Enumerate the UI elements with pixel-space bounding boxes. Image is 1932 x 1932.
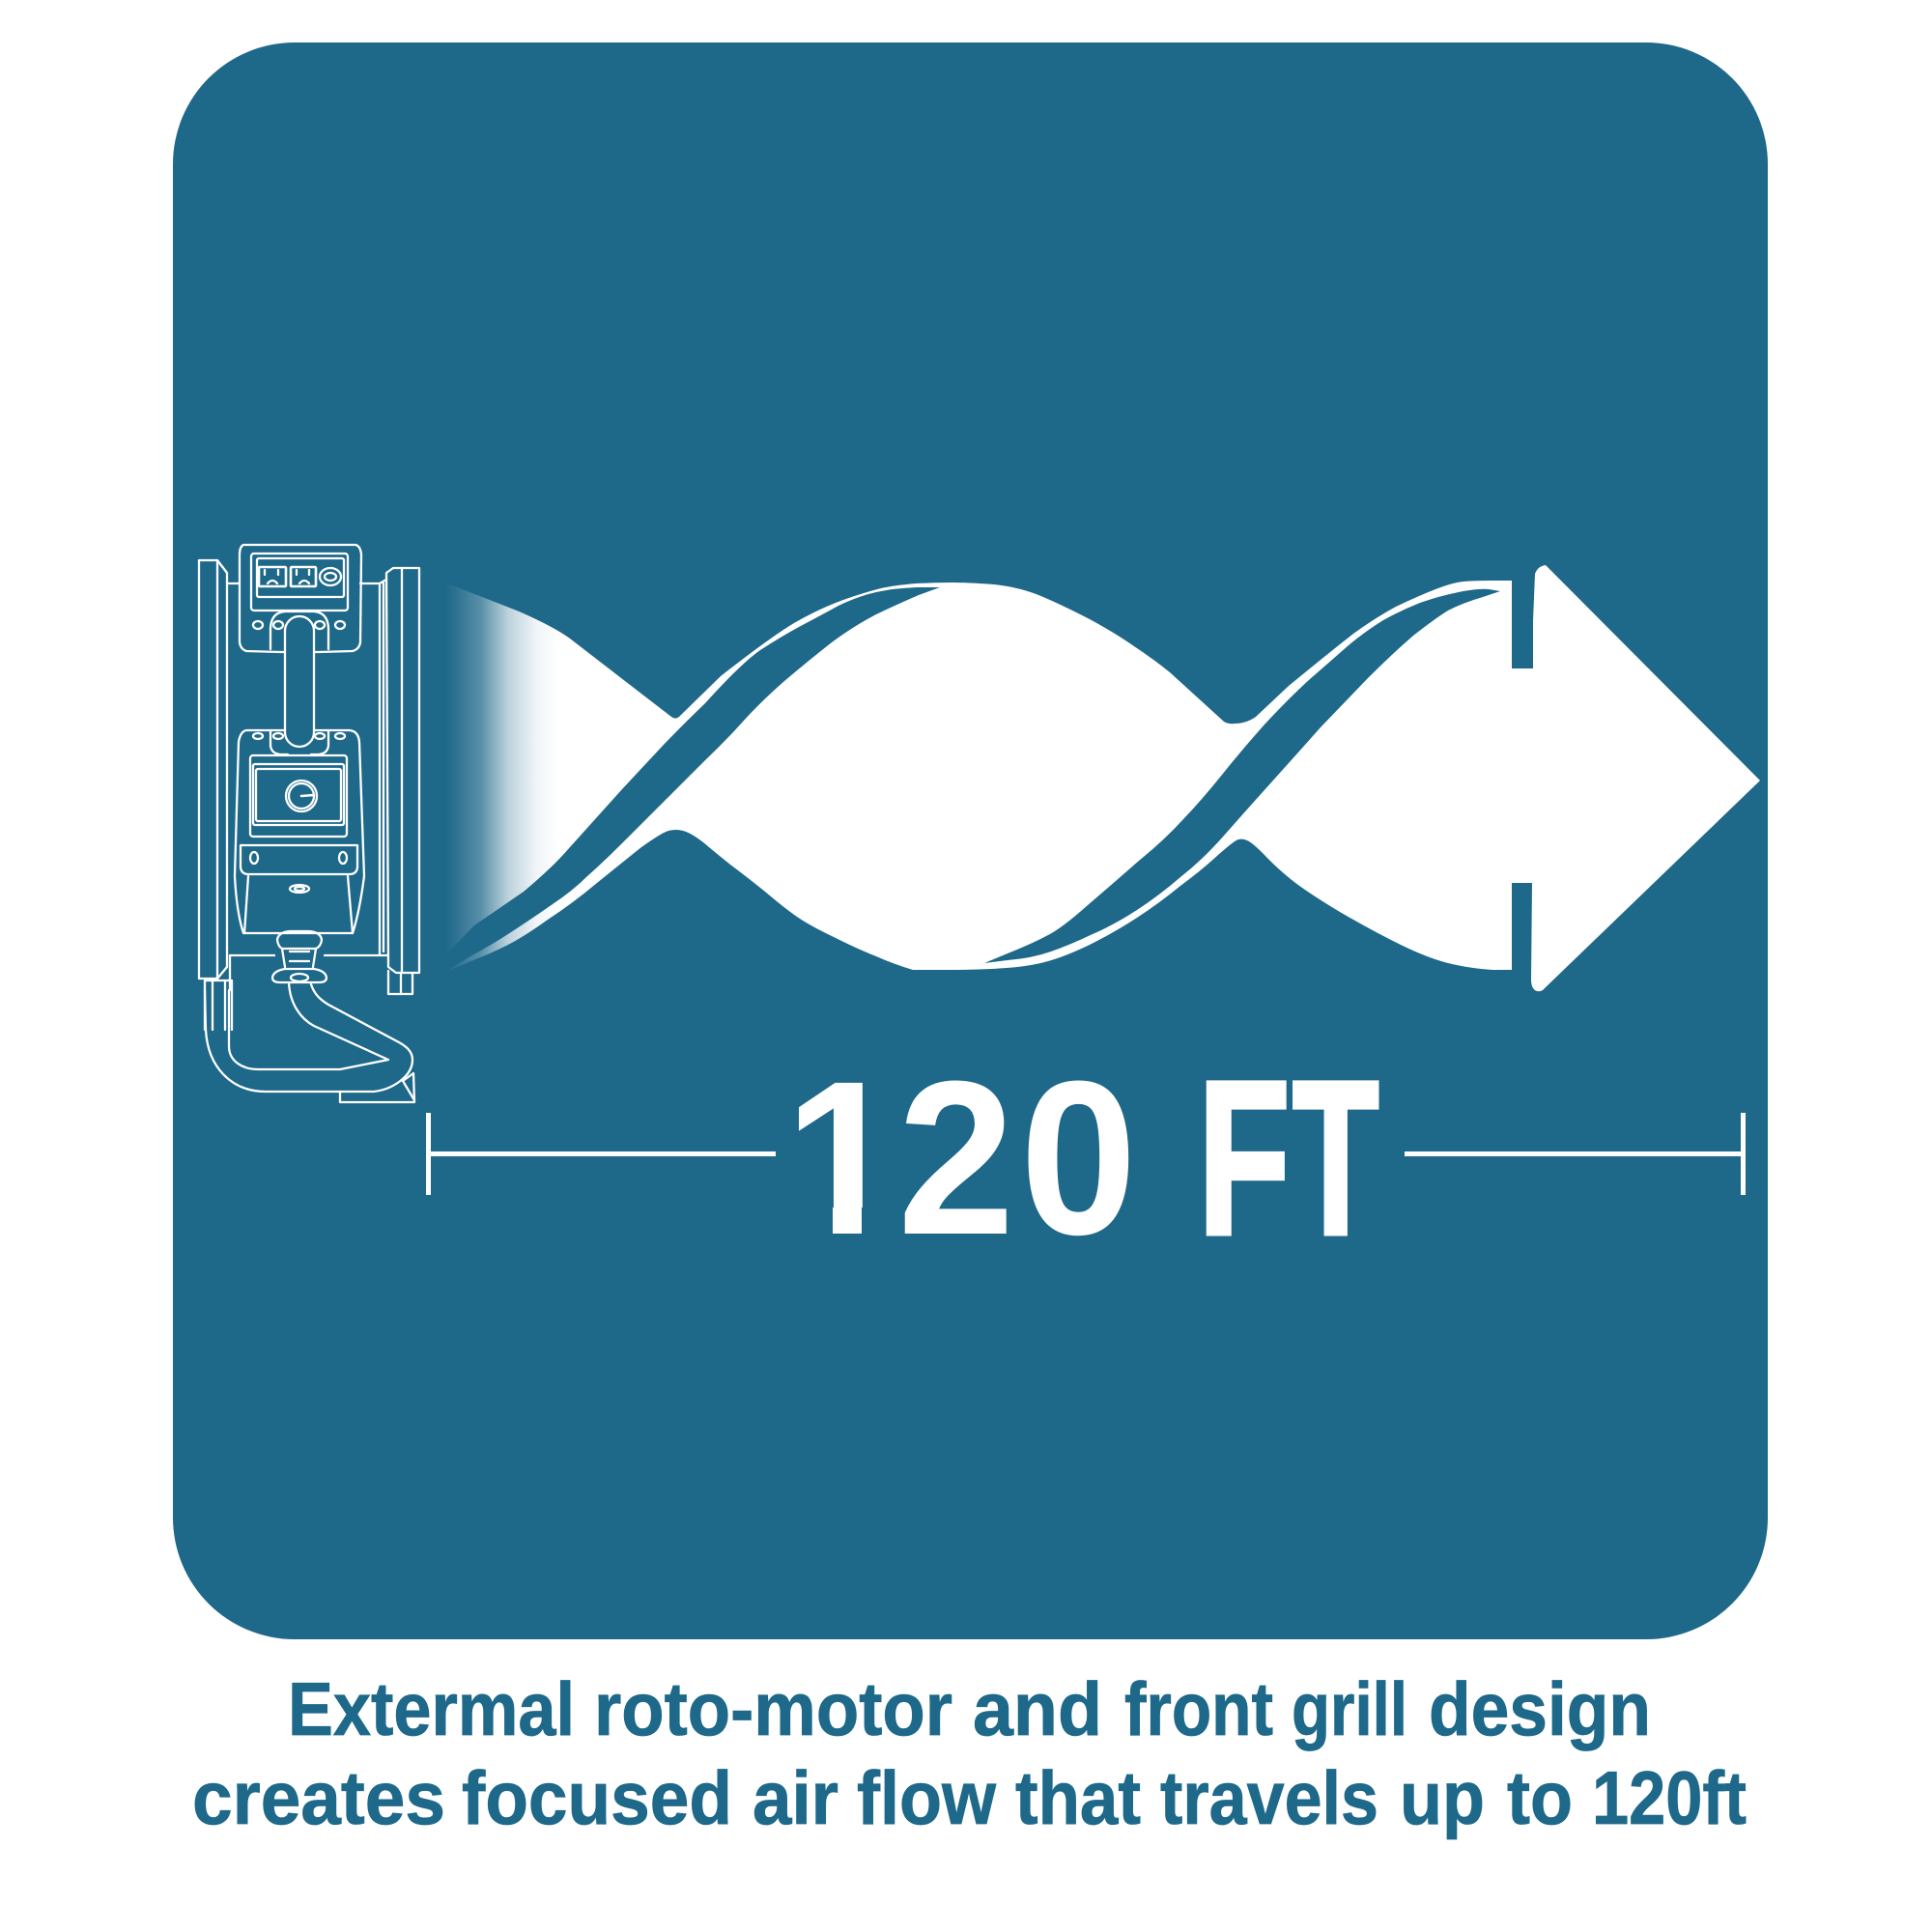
caption text: 120ft bbox=[1592, 1755, 1747, 1840]
fan: frame bbox=[227, 580, 388, 990]
arrow: second dark ribbon bbox=[984, 589, 1500, 963]
caption text: air bbox=[753, 1755, 838, 1840]
distance bar: left line bbox=[431, 1151, 776, 1156]
caption text: front bbox=[1124, 1666, 1273, 1751]
caption text: that bbox=[1015, 1755, 1141, 1840]
caption text: and bbox=[973, 1666, 1102, 1751]
caption text: design bbox=[1429, 1666, 1651, 1751]
heading: 120 FT: F bbox=[1198, 1036, 1291, 1281]
air flow arrow bbox=[430, 565, 1760, 991]
arrow: white twisted shape bbox=[442, 565, 1760, 991]
arrow: first dark ribbon bbox=[430, 587, 940, 974]
caption text: roto-motor bbox=[594, 1666, 952, 1751]
caption text: creates bbox=[192, 1755, 445, 1840]
caption text: flow bbox=[857, 1755, 996, 1840]
caption text bbox=[192, 1666, 1747, 1840]
fan: lower control box bbox=[235, 730, 364, 933]
heading: 120 FT: T bbox=[1293, 1037, 1378, 1281]
caption text: travels bbox=[1160, 1755, 1378, 1840]
caption text: Extermal bbox=[288, 1666, 575, 1751]
distance bar: right tick bbox=[1741, 1113, 1746, 1195]
distance bar: left tick bbox=[426, 1113, 431, 1195]
heading: 120 FT bbox=[784, 1036, 1378, 1281]
fan: handle bbox=[285, 616, 314, 747]
fan: top outlet box bbox=[240, 545, 361, 652]
fan: hose bbox=[205, 980, 414, 1102]
fan: left bar bbox=[199, 560, 227, 979]
caption text: focused bbox=[462, 1755, 732, 1840]
caption text: grill bbox=[1292, 1666, 1407, 1751]
panel: blue rounded background bbox=[173, 43, 1768, 1639]
arrow: left fade bbox=[430, 570, 560, 985]
fan: hose knob bbox=[272, 931, 327, 982]
caption text: up bbox=[1400, 1755, 1485, 1840]
fan: right bar bbox=[386, 568, 419, 994]
distance bar: right line bbox=[1405, 1151, 1741, 1156]
caption text: to bbox=[1507, 1755, 1573, 1840]
heading: 120 FT: 120 bbox=[784, 1037, 1137, 1281]
icon: fan line drawing bbox=[199, 545, 419, 1102]
